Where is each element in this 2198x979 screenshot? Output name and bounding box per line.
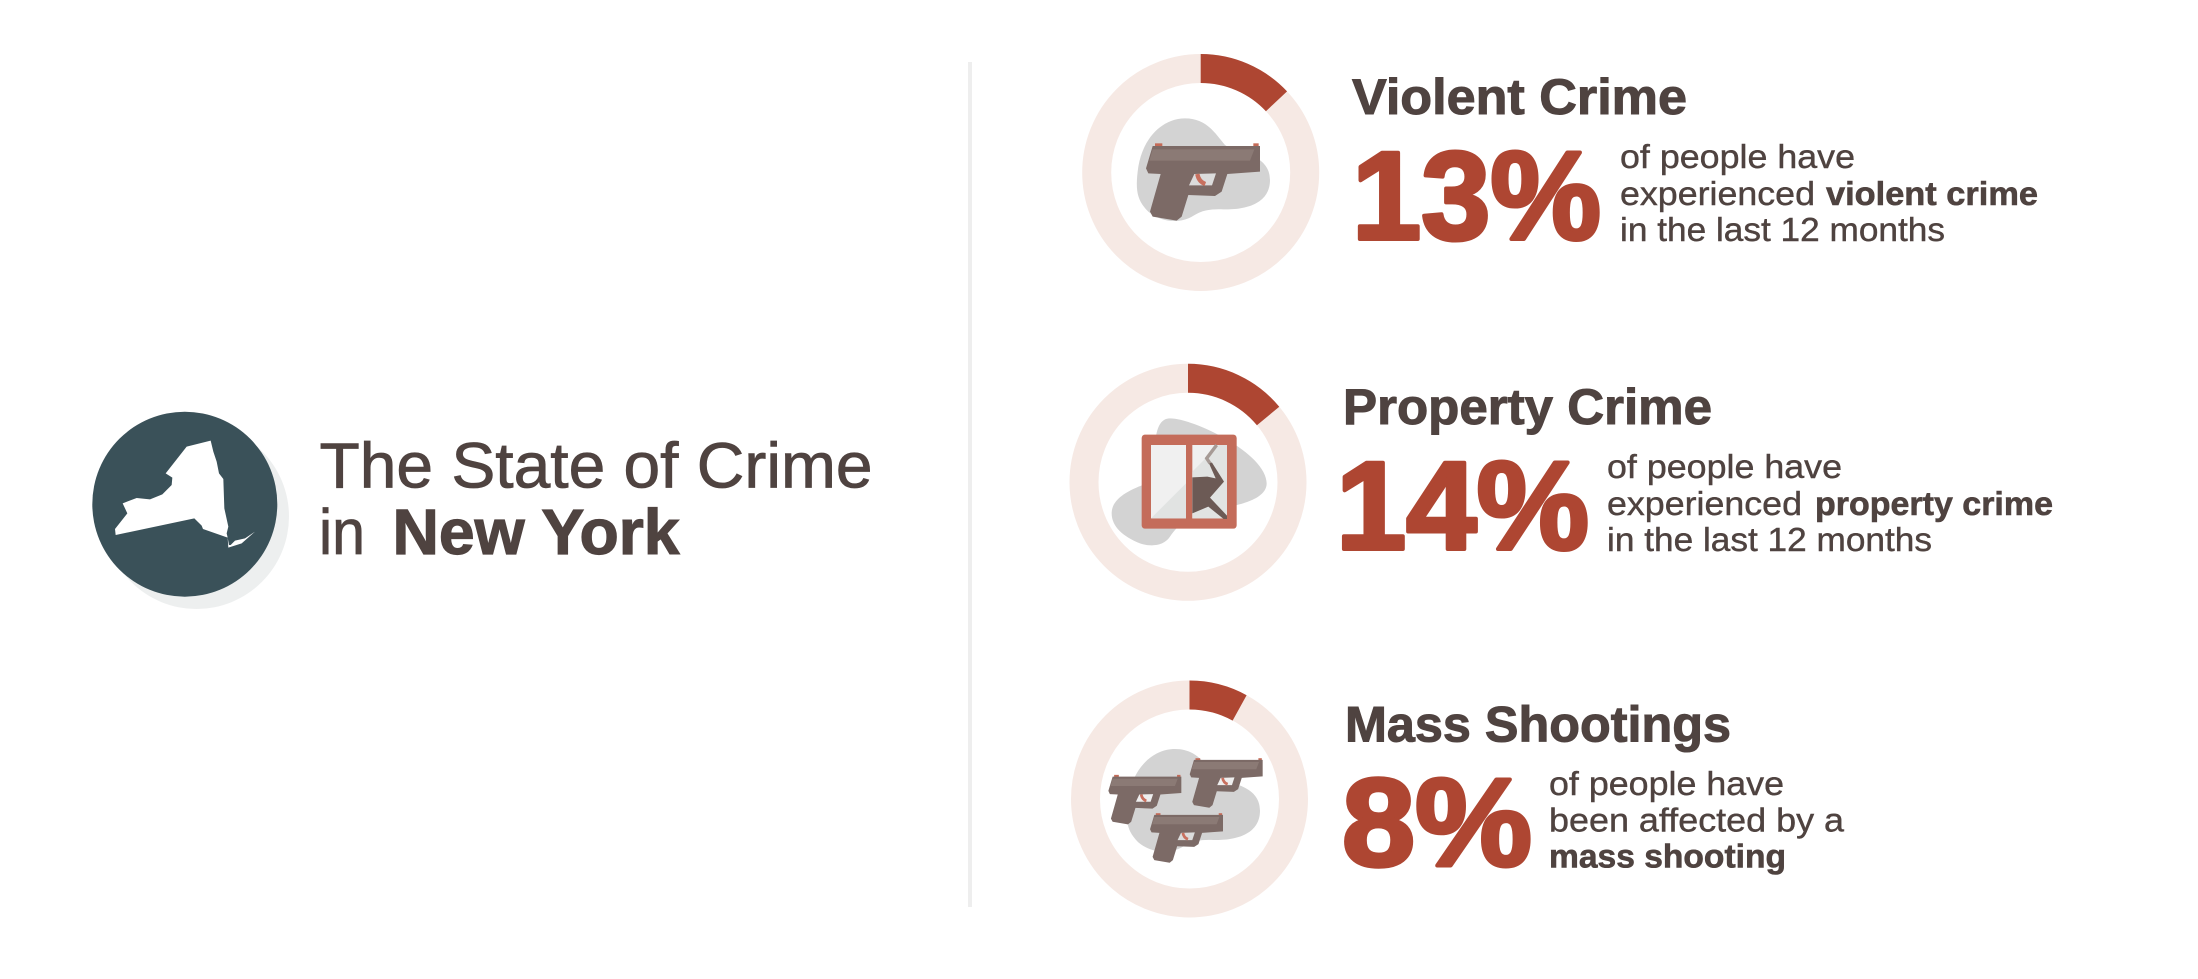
panel: mass shootings (1086, 695, 1845, 903)
icon: three handguns (1108, 749, 1263, 863)
heading: Mass Shootings (1345, 696, 1731, 752)
description (1607, 448, 2053, 558)
big number: 14% (1336, 437, 1589, 576)
panel: violent crime (1097, 68, 2038, 276)
description: property crime (1815, 485, 2053, 522)
icon: New York state silhouette (115, 441, 255, 548)
emblem circle (92, 412, 277, 597)
donut chart: 13% (1097, 68, 1305, 276)
heading: Violent Crime (1352, 69, 1687, 125)
title: New York (392, 496, 680, 568)
donut chart: 14% (1084, 378, 1292, 586)
big number: 13% (1352, 127, 1601, 266)
description: of people have (1549, 765, 1784, 802)
donut chart: 8% (1086, 695, 1294, 903)
panel: state emblem (92, 412, 289, 609)
panel: property crime (1084, 378, 2053, 586)
description (1620, 138, 2038, 248)
description: of people have (1620, 138, 1855, 175)
heading: Property Crime (1343, 379, 1712, 435)
title (319, 429, 872, 568)
description: of people have (1607, 448, 1842, 485)
title: The State of Crime (320, 429, 872, 501)
description: experienced (1620, 175, 1815, 212)
description: in the last 12 months (1607, 521, 1932, 558)
big number: 8% (1342, 754, 1532, 892)
description: violent crime (1826, 175, 2038, 212)
title: in (319, 496, 365, 568)
description: in the last 12 months (1620, 211, 1945, 248)
description: been affected by a (1549, 802, 1845, 838)
icon: broken window (1112, 418, 1267, 545)
description: mass shooting (1549, 838, 1786, 874)
icon: handgun (1137, 118, 1270, 221)
description: experienced (1607, 485, 1802, 522)
description (1549, 765, 1845, 874)
emblem shadow (104, 424, 289, 609)
